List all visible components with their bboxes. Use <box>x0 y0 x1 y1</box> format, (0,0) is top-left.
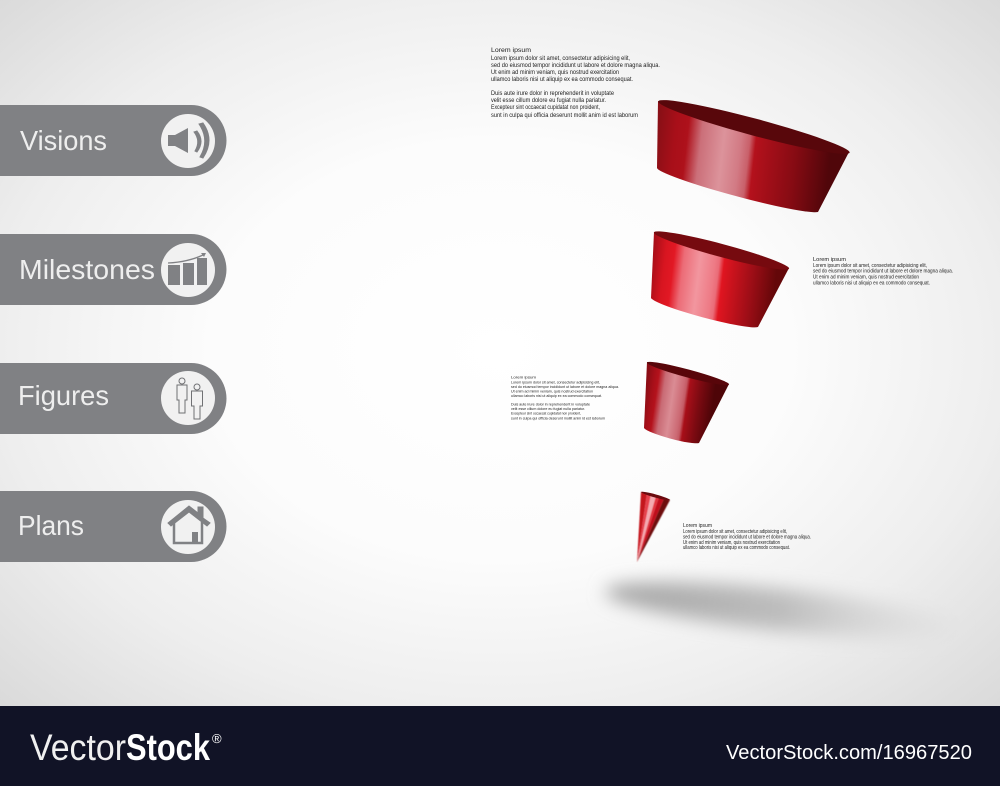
text block: top: Duis aute irure dolor in reprehenderit in voluptate <box>491 90 614 97</box>
cone segment 1 <box>656 93 852 212</box>
text block: top: Lorem ipsum dolor sit amet, consectetur adipisicing elit, <box>491 55 630 62</box>
pill: Visions <box>0 105 226 176</box>
text block: right of segment 2 <box>813 257 953 286</box>
cone segment 2 <box>651 226 791 327</box>
label: Figures: Figures <box>18 380 109 411</box>
text block: right of segment 2: Lorem ipsum dolor sit amet, consectetur adipisicing elit, <box>813 263 927 269</box>
pill: Plans <box>0 491 226 562</box>
text block: left of segment 3: sunt in culpa qui officia deserunt mollit anim id est laborum <box>511 416 605 420</box>
text block: right of segment 4: Lorem ipsum <box>683 523 712 529</box>
icon: people <box>161 371 215 425</box>
text block: top: sunt in culpa qui officia deserunt mollit anim id est laborum <box>491 112 638 119</box>
text block: right of segment 2: sed do eiusmod tempor incididunt ut labore et dolore magna aliqua. <box>813 268 953 274</box>
text block: top: velit esse cillum dolore eu fugiat nulla pariatur. <box>491 97 606 104</box>
text block: right of segment 4: Lorem ipsum dolor sit amet, consectetur adipisicing elit, <box>683 529 787 535</box>
logo: VectorStock <box>30 727 222 768</box>
text block: left of segment 3: sed do eiusmod tempor incididunt ut labore et dolore magna aliqua. <box>511 384 619 389</box>
text block: left of segment 3: Excepteur sint occaecat cupidatat non proident, <box>511 410 581 416</box>
text block: top: Excepteur sint occaecat cupidatat non proident, <box>491 104 600 111</box>
cone segment 3 <box>644 359 730 443</box>
logo: VectorStock: Stock <box>126 727 210 768</box>
text block: left of segment 3: Lorem ipsum dolor sit amet, consectetur adipisicing elit, <box>511 380 600 384</box>
label: Plans: Plans <box>18 510 84 541</box>
label: Milestones: Milestones <box>19 254 155 285</box>
image id: VectorStock.com/16967520 <box>726 742 972 764</box>
icon: speaker <box>161 114 215 168</box>
text block: right of segment 2: ullamco laboris nisi ut aliquip ex ea commodo consequat. <box>813 280 930 286</box>
cone shadow <box>603 571 961 649</box>
pill: Milestones <box>0 234 226 305</box>
text block: left of segment 3: Lorem ipsum <box>511 374 536 380</box>
logo: VectorStock: Vector <box>30 727 126 768</box>
logo: VectorStock: ® <box>212 731 222 746</box>
text block: top: sed do eiusmod tempor incididunt ut labore et dolore magna aliqua. <box>491 62 660 69</box>
text block: right of segment 4: Ut enim ad minim veniam, quis nostrud exercitation <box>683 540 780 546</box>
label: Visions: Visions <box>20 125 107 156</box>
text block: left of segment 3: velit esse cillum dolore eu fugiat nulla pariatur. <box>511 406 585 411</box>
text block: right of segment 2: Ut enim ad minim veniam, quis nostrud exercitation <box>813 274 919 280</box>
text block: left of segment 3 <box>511 374 619 420</box>
text block: top: Ut enim ad minim veniam, quis nostrud exercitation <box>491 69 619 76</box>
text block: right of segment 2: Lorem ipsum <box>813 257 847 263</box>
text block: left of segment 3: Duis aute irure dolor in reprehenderit in voluptate <box>511 402 590 406</box>
text block: top: ullamco laboris nisi ut aliquip ex ea commodo consequat. <box>491 76 633 83</box>
text block: right of segment 4: sed do eiusmod tempor incididunt ut labore et dolore magna aliqua. <box>683 534 811 540</box>
text block: right of segment 4: ullamco laboris nisi ut aliquip ex ea commodo consequat. <box>683 545 790 551</box>
icon: bar chart <box>161 243 215 297</box>
cone segment 4 <box>637 490 670 562</box>
pill: Figures <box>0 363 226 434</box>
footer bar <box>0 706 1000 786</box>
icon: house <box>161 500 215 554</box>
text block: top: Lorem ipsum <box>491 47 531 54</box>
text block: right of segment 4 <box>683 523 811 551</box>
text block: top <box>491 47 660 119</box>
text block: left of segment 3: ullamco laboris nisi ut aliquip ex ea commodo consequat. <box>511 393 602 398</box>
text block: left of segment 3: Ut enim ad minim veniam, quis nostrud exercitation <box>511 388 593 394</box>
